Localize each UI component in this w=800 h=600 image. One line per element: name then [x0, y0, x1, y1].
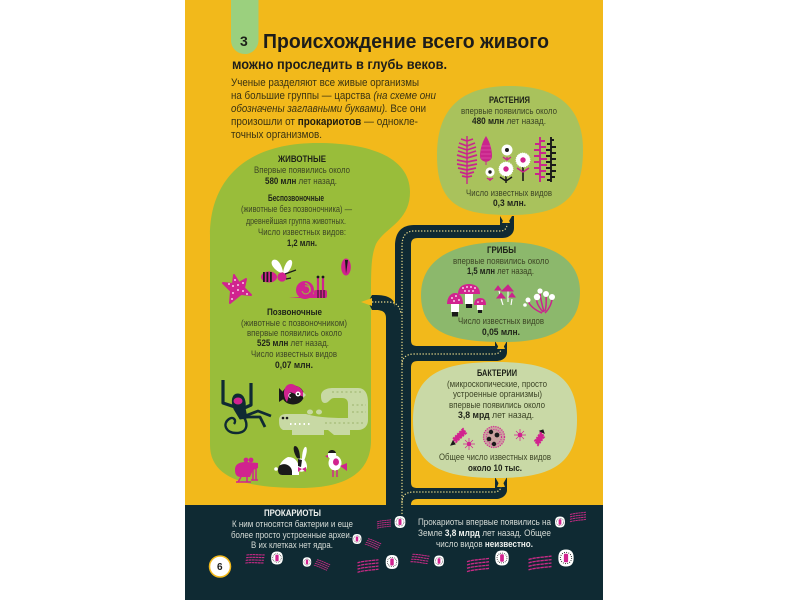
intro text: точных организмов. [231, 129, 322, 141]
intro text: обозначены заглавными буквами). Все они [231, 103, 426, 115]
intro text: на большие группы — царства (на схеме они [231, 90, 436, 102]
page number badge: 6 [217, 562, 223, 573]
animals text: Число известных видов: [258, 227, 346, 237]
intro text: Ученые разделяют все живые организмы [231, 77, 419, 89]
panel: animals [210, 143, 410, 488]
icons: prokaryote microbes [245, 512, 586, 572]
vertebrates text [241, 318, 347, 370]
vertebrates heading: Позвоночные [267, 307, 322, 317]
yellow page background [185, 0, 603, 505]
prokaryotes right text [418, 517, 551, 549]
animals heading: ЖИВОТНЫЕ [277, 154, 326, 164]
bacteria species count: Общее число известных видов [439, 452, 551, 462]
prokaryotes right text: Прокариоты впервые появились на [418, 517, 551, 527]
icon: bird [325, 450, 347, 477]
arrow: to bacteria [497, 477, 505, 487]
bacteria text [447, 379, 547, 420]
animals text: древнейшая группа животных. [246, 216, 346, 226]
bacteria species count: около 10 тыс. [468, 463, 522, 473]
icon: snail [289, 276, 327, 299]
bacteria species count [439, 452, 551, 473]
animals text: Впервые появились около [254, 165, 350, 175]
icon: pink branch [534, 137, 547, 182]
prokaryotes left text [231, 508, 353, 550]
animals text: 1,2 млн. [287, 238, 317, 248]
bacteria heading: БАКТЕРИИ [477, 368, 517, 378]
vertebrates text: 0,07 млн. [275, 360, 313, 370]
plants text: впервые появились около [461, 106, 557, 116]
fungi text: впервые появились около [453, 256, 549, 266]
intro text: произошли от прокариотов — однокле- [231, 116, 418, 128]
icon: rabbit [274, 446, 307, 475]
plants text: 480 млн лет назад. [472, 116, 546, 126]
prokaryotes left text: более просто устроенные археи. [231, 530, 352, 540]
fungi heading: ГРИБЫ [487, 245, 516, 255]
fungi species count: 0,05 млн. [482, 327, 520, 337]
plants species count [466, 188, 552, 208]
bacteria text: 3,8 мрд лет назад. [458, 410, 534, 420]
icon: round colony [483, 426, 505, 448]
road: dotted centre lines [372, 224, 507, 514]
title: Происхождение всего живого [263, 31, 549, 53]
panel: fungi [421, 242, 580, 342]
arrow: to fungi [497, 340, 505, 349]
prokaryotes left text: К ним относятся бактерии и еще [232, 519, 353, 529]
fungi text [453, 256, 549, 276]
road: trunk and branches [368, 216, 514, 505]
bacteria text: впервые появились около [449, 400, 545, 410]
icon: bacterium right [535, 430, 544, 445]
intro text [231, 77, 436, 141]
section number: 3 [240, 33, 248, 49]
animals text: (животные без позвоночника) — [241, 204, 352, 214]
page number badge [210, 556, 230, 577]
icon: star microbe right [514, 429, 526, 441]
prokaryotes left text: В их клетках нет ядра. [251, 540, 333, 550]
plants species count: 0,3 млн. [493, 198, 526, 208]
icon: beetle [341, 258, 351, 276]
icon: flowers [485, 144, 530, 183]
prokaryotes left text: ПРОКАРИОТЫ [264, 508, 321, 518]
icon: pink fern [457, 136, 477, 184]
vertebrates text: (животные с позвоночником) [241, 318, 347, 328]
fungi species count [458, 316, 544, 337]
icon: bee [261, 260, 296, 282]
green number tab [231, 0, 258, 54]
icon: pink leaf [480, 136, 492, 165]
icon: spotted mushrooms [447, 284, 486, 316]
vertebrates text: Число известных видов [251, 349, 337, 359]
vertebrates text: 525 млн лет назад. [257, 338, 329, 348]
icon: crocodile [279, 388, 368, 435]
icon: white-cap mushrooms [523, 288, 555, 313]
plants species count: Число известных видов [466, 188, 552, 198]
bacteria text: (микроскопические, просто [447, 379, 547, 389]
animals text: 580 млн лет назад. [265, 176, 337, 186]
fungi text: 1,5 млн лет назад. [467, 266, 534, 276]
plants text [461, 106, 557, 126]
panel: road network [361, 213, 514, 514]
plants heading: РАСТЕНИЯ [489, 95, 530, 105]
icon: bacterium left [451, 429, 466, 445]
subtitle: можно проследить в глубь веков. [232, 56, 447, 72]
fungi species count: Число известных видов [458, 316, 544, 326]
arrow: to animals [361, 298, 372, 306]
icon: black branch [546, 137, 556, 182]
icon: fish [279, 384, 306, 404]
icon: frog [235, 458, 258, 482]
vertebrates text: впервые появились около [247, 328, 342, 338]
icon: star microbe left [463, 438, 475, 450]
prokaryotes right text: Земле 3,8 млрд лет назад. Общее [418, 528, 551, 538]
prokaryotes right text: число видов неизвестно. [436, 539, 533, 549]
bacteria text: устроенные организмы) [453, 389, 542, 399]
icon: starfish [223, 275, 251, 303]
panel: plants [437, 86, 583, 215]
animals text [241, 165, 352, 248]
icon: small mushrooms [495, 285, 515, 305]
bottom dark band [185, 505, 603, 600]
animals text: Беспозвоночные [268, 193, 324, 203]
icon: monkey [223, 380, 271, 433]
arrow: to plants [502, 213, 510, 223]
panel: bacteria [413, 362, 577, 478]
